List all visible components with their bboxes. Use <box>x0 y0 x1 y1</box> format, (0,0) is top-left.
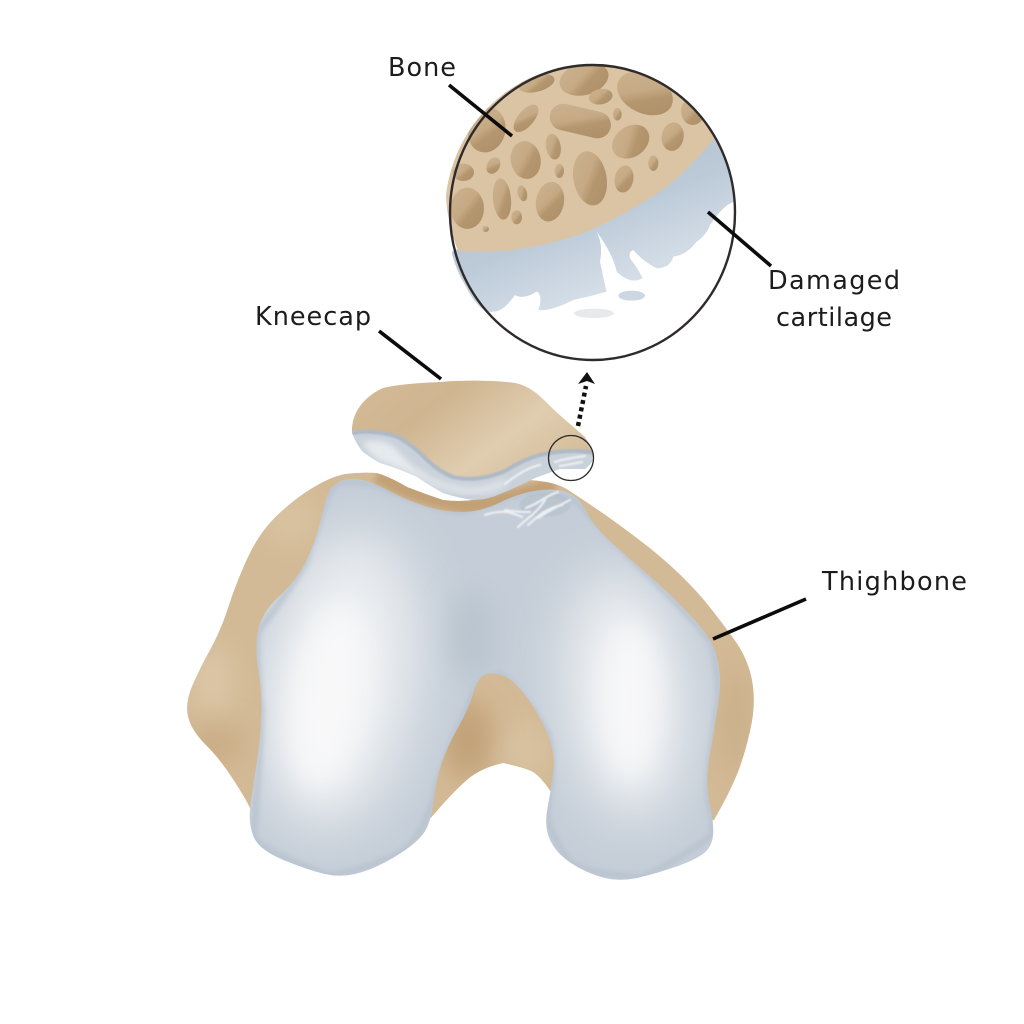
thighbone illustration <box>187 472 754 880</box>
label: thighbone <box>713 567 967 639</box>
thighbone cartilage <box>239 470 730 890</box>
frayed cartilage texture <box>485 492 571 527</box>
thighbone bone layer <box>187 472 754 820</box>
kneecap cartilage <box>352 429 592 500</box>
label: bone: Bone <box>388 53 456 83</box>
small magnifier circle <box>548 436 594 480</box>
kneecap bone <box>352 381 593 490</box>
label: kneecap: Kneecap <box>255 302 371 332</box>
label: damaged cartilage: cartilage <box>776 303 892 333</box>
label: damaged cartilage: Damaged <box>768 266 900 296</box>
magnified cartilage <box>452 138 734 312</box>
label: thighbone: Thighbone <box>821 567 967 597</box>
magnified cartilage circle <box>446 57 735 360</box>
magnifier ring <box>450 65 735 360</box>
magnified bone <box>446 65 714 252</box>
label: bone <box>388 53 512 136</box>
arrow: dotted pointer to magnifier <box>578 372 595 426</box>
bone pores <box>451 57 704 232</box>
kneecap illustration <box>340 381 595 505</box>
label: kneecap <box>255 302 441 379</box>
label: damaged cartilage <box>708 212 900 333</box>
cartilage fragments <box>574 291 645 318</box>
